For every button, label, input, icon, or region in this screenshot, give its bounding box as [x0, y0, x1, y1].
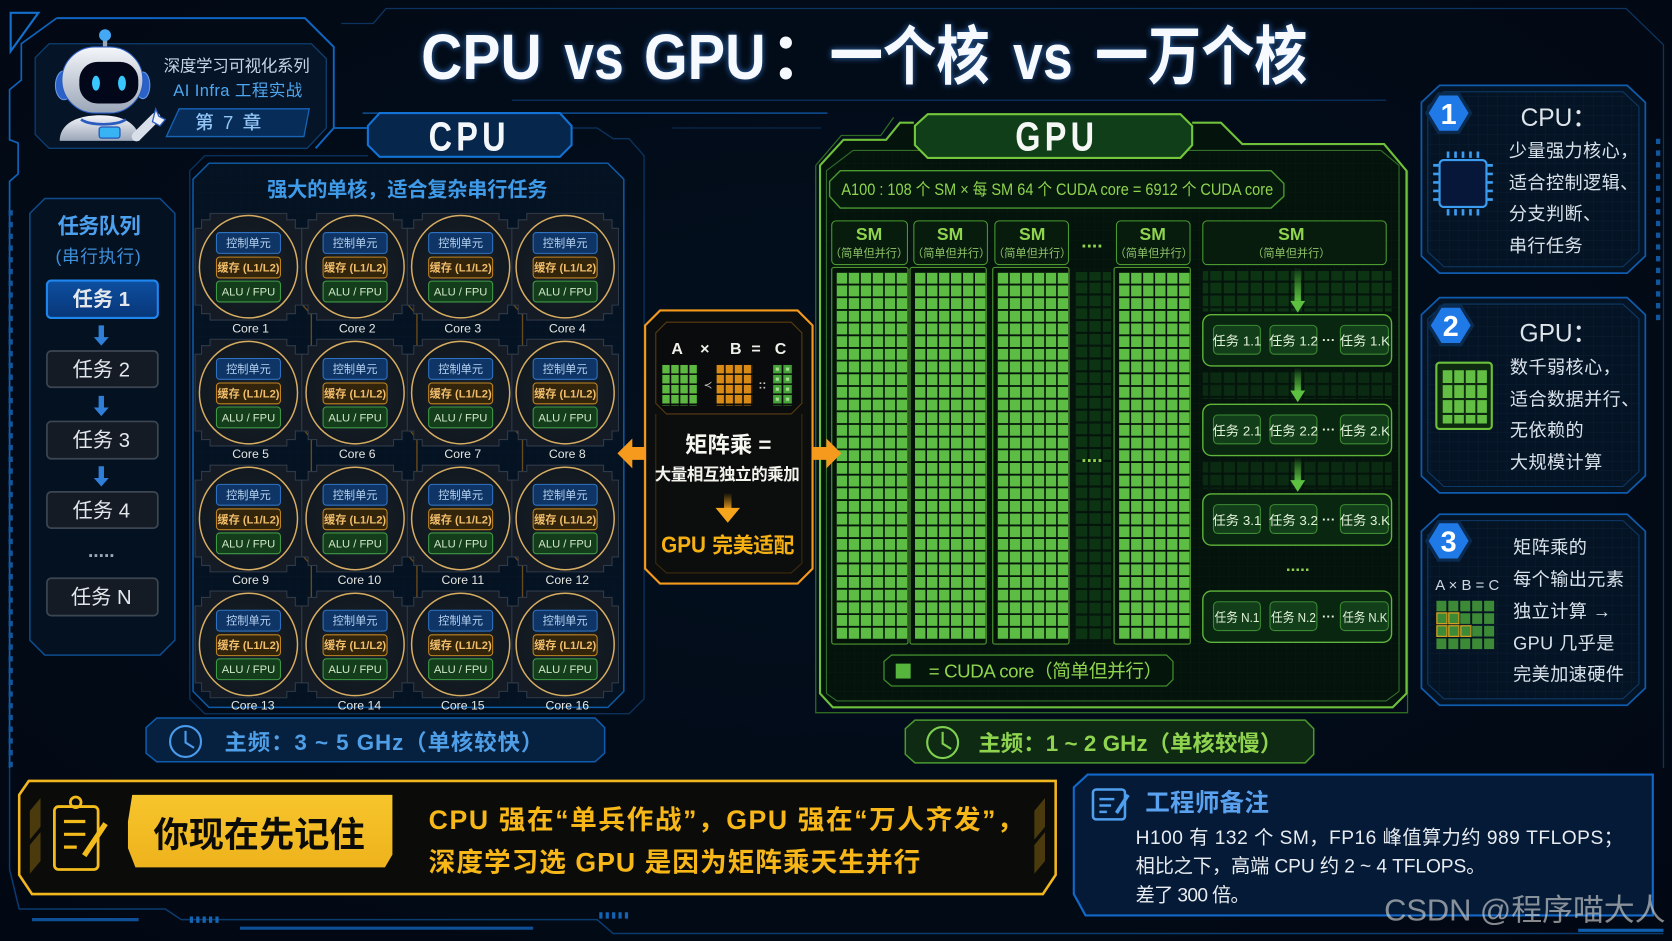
- ellipsis: .....: [1286, 556, 1310, 575]
- SM header 3: SM: [1019, 224, 1045, 244]
- core 7: ALU / FPU: [434, 412, 487, 424]
- core 3: 缓存 (L1/L2): [430, 261, 492, 275]
- core 2: 控制单元: [333, 236, 377, 250]
- formula: A × B = C: [1435, 577, 1499, 594]
- task row 2: 任务 2.2: [1269, 423, 1318, 438]
- task row 3: [1203, 494, 1392, 545]
- task row 3: 任务 3.2: [1269, 513, 1318, 528]
- task 4: [47, 492, 158, 528]
- matrix formula: C: [775, 341, 787, 358]
- title: GPU: [644, 21, 766, 93]
- core 2: Core 2: [339, 321, 376, 335]
- matrix formula: ::: [759, 378, 766, 391]
- core 1: [195, 213, 302, 335]
- title: 一万个核: [1095, 21, 1307, 93]
- SM header 1: （简单但并行）: [830, 246, 908, 260]
- core 2: ALU / FPU: [328, 287, 382, 299]
- task row N: 任务 N.K: [1343, 610, 1387, 625]
- task row 1: ···: [1322, 333, 1335, 348]
- core 4: 控制单元: [543, 236, 588, 250]
- core 10: 控制单元: [333, 488, 377, 502]
- SM core grid 1: [832, 267, 908, 644]
- GPU banner: [915, 114, 1192, 159]
- icon: clock: [170, 726, 201, 757]
- task row 1: 任务 1.K: [1340, 334, 1390, 349]
- core 11: 控制单元: [438, 488, 483, 502]
- ellipsis: ....: [1081, 446, 1103, 467]
- task 2: [47, 351, 158, 387]
- chapter tag: [166, 109, 309, 137]
- arrow: to CPU: [617, 438, 645, 468]
- note text: 差了 300 倍。: [1136, 885, 1250, 907]
- task 3: [47, 421, 158, 459]
- core 3: 控制单元: [438, 236, 483, 250]
- core 11: ALU / FPU: [434, 538, 487, 550]
- core 1: 控制单元: [226, 236, 271, 250]
- title: CPU: [421, 21, 542, 93]
- core 13: Core 13: [231, 698, 275, 712]
- takeaway line 1: CPU 强在“单兵作战”，GPU 强在“万人齐发”，: [429, 805, 1024, 835]
- core 14: 缓存 (L1/L2): [324, 638, 386, 652]
- core 16: 控制单元: [543, 614, 588, 628]
- SM core grid 4: [1114, 267, 1190, 644]
- arrow: task flow: [1290, 267, 1305, 492]
- core 10: ALU / FPU: [328, 538, 382, 550]
- panel: GPU note: [1421, 298, 1645, 493]
- series name: 深度学习可视化系列: [164, 56, 310, 75]
- task row 2: [1203, 404, 1392, 456]
- core 9: 缓存 (L1/L2): [217, 512, 280, 526]
- task 1: [47, 281, 158, 318]
- panel: matrix multiplication: [645, 310, 813, 584]
- legend: = CUDA core（简单但并行）: [929, 660, 1162, 681]
- GPU note text: 无依赖的: [1510, 420, 1584, 440]
- task N: 任务 N: [71, 586, 132, 609]
- core 4: ALU / FPU: [538, 287, 592, 299]
- panel: GPU: [816, 114, 1408, 713]
- task 3: 任务 3: [73, 429, 130, 452]
- title: vs: [564, 21, 624, 93]
- task 2: 任务 2: [73, 359, 130, 382]
- core 5: 缓存 (L1/L2): [217, 386, 280, 400]
- SM core grid 3: [993, 267, 1069, 644]
- matrix formula: [662, 341, 793, 405]
- core 3: [407, 213, 514, 335]
- SM header 3: （简单但并行）: [993, 246, 1071, 260]
- SM header detail: [1203, 221, 1386, 265]
- core 13: 缓存 (L1/L2): [217, 638, 280, 652]
- task N: [47, 578, 158, 616]
- core 1: ALU / FPU: [222, 287, 275, 299]
- core 10: [302, 465, 408, 587]
- icon: clock: [927, 727, 958, 758]
- icon: GPU grid: [1436, 363, 1492, 429]
- title: vs: [1013, 21, 1073, 93]
- ellipsis: ....: [1081, 232, 1103, 253]
- task row 1: 任务 1.2: [1269, 334, 1318, 349]
- arrow: to GPU: [813, 438, 841, 468]
- matrix conclusion: [661, 532, 795, 558]
- title: CPU: [421, 21, 542, 93]
- panel: CPU: [190, 113, 644, 714]
- title: 一个核: [830, 21, 990, 93]
- CPU note text: CPU：: [1521, 105, 1597, 132]
- panel: engineer note: [1074, 775, 1653, 915]
- panel: matrix note: [1421, 514, 1645, 705]
- task row 3: 任务 3.1: [1212, 513, 1261, 528]
- task row 2: 任务 2.K: [1340, 423, 1390, 438]
- core 12: 缓存 (L1/L2): [534, 512, 596, 526]
- arrow: down: [716, 493, 740, 523]
- core 16: ALU / FPU: [538, 664, 592, 676]
- SM header 1: [830, 221, 908, 265]
- core 13: ALU / FPU: [222, 664, 275, 676]
- core 1: 缓存 (L1/L2): [217, 261, 280, 275]
- SM header 3: [993, 221, 1071, 265]
- GPU spec: [830, 171, 1284, 208]
- core 3: ALU / FPU: [434, 287, 487, 299]
- core 11: [407, 465, 514, 587]
- title: ：: [770, 21, 834, 93]
- CPU heading: 强大的单核，适合复杂串行任务: [267, 177, 548, 201]
- GPU note text: 数千弱核心，: [1510, 357, 1621, 377]
- core 12: Core 12: [545, 573, 589, 587]
- task queue heading: 任务队列: [58, 215, 141, 239]
- remember tag: 你现在先记住: [154, 816, 365, 855]
- task row 1: 任务 1.1: [1212, 334, 1261, 349]
- core 12: 控制单元: [543, 488, 588, 502]
- matrix note text: [1513, 538, 1624, 685]
- matrix formula: ×: [700, 341, 710, 358]
- core 14: 控制单元: [333, 614, 377, 628]
- core 15: Core 15: [441, 698, 485, 712]
- matrix formula: =: [751, 341, 761, 358]
- matrix formula: A: [671, 341, 683, 358]
- core 8: ALU / FPU: [538, 412, 592, 424]
- core 9: Core 9: [232, 573, 269, 587]
- task row 2: 任务 2.1: [1212, 423, 1261, 438]
- SM header 2: SM: [937, 224, 963, 244]
- GPU note text: GPU：: [1520, 320, 1597, 347]
- takeaway line 2: 深度学习选 GPU 是因为矩阵乘天生并行: [429, 848, 920, 878]
- icon: chip: [1433, 151, 1493, 216]
- CPU banner: CPU: [429, 114, 510, 159]
- GPU note text: [1510, 320, 1640, 472]
- task row 3: 任务 3.K: [1340, 513, 1390, 528]
- core 8: 缓存 (L1/L2): [534, 386, 596, 400]
- matrix conclusion: 完美适配: [712, 534, 795, 558]
- panel: task queue: [30, 198, 175, 655]
- faint detail grid: [1203, 271, 1392, 489]
- core 16: Core 16: [545, 698, 589, 712]
- core 14: [302, 591, 408, 712]
- matrix formula: ≺: [704, 379, 713, 391]
- title: GPU: [644, 21, 766, 93]
- SM header 1: SM: [856, 224, 882, 244]
- core 16: 缓存 (L1/L2): [534, 638, 596, 652]
- core 7: [407, 339, 514, 461]
- panel: series header: [35, 18, 334, 148]
- core 15: [407, 591, 514, 712]
- core 13: [195, 591, 302, 712]
- title: vs: [564, 21, 624, 93]
- GPU spec: A100 : 108 个 SM × 每 SM 64 个 CUDA core = 6912 个 CUDA core: [841, 180, 1273, 199]
- note text: H100 有 132 个 SM，FP16 峰值算力约 989 TFLOPS；: [1136, 827, 1623, 849]
- SM core grid 2: [910, 267, 986, 644]
- task row 2: ···: [1322, 422, 1335, 437]
- note text: 相比之下，高端 CPU 约 2 ~ 4 TFLOPS。: [1136, 856, 1485, 878]
- faint middle column: [1075, 272, 1111, 640]
- SM header detail: SM: [1278, 224, 1305, 244]
- chapter tag: 第 7 章: [195, 112, 261, 133]
- core 15: 缓存 (L1/L2): [430, 638, 492, 652]
- matrix note text: 独立计算 →: [1513, 602, 1611, 622]
- GPU note text: 大规模计算: [1510, 452, 1603, 472]
- GPU note text: 适合数据并行、: [1510, 389, 1640, 409]
- core 5: ALU / FPU: [222, 412, 275, 424]
- task row N: ···: [1322, 609, 1335, 624]
- icon: result grid: [1436, 601, 1496, 651]
- badge 3: [1427, 522, 1470, 560]
- core 12: [512, 465, 618, 587]
- badge 2: [1429, 306, 1473, 345]
- GPU banner: GPU: [1015, 114, 1098, 159]
- task row N: [1203, 591, 1392, 642]
- matrix description: 大量相互独立的乘加: [655, 464, 800, 484]
- GPU frequency bar: 主频：1 ~ 2 GHz（单核较慢）: [978, 731, 1282, 756]
- title: 一万个核: [1095, 21, 1307, 93]
- GPU frequency bar: [905, 720, 1314, 763]
- icon: note edit: [1093, 790, 1128, 819]
- badge 2: 2: [1443, 311, 1459, 343]
- SM header 4: [1115, 221, 1193, 265]
- matrix conclusion: GPU: [661, 532, 706, 558]
- core 6: 缓存 (L1/L2): [324, 386, 386, 400]
- CPU note text: 分支判断、: [1509, 204, 1602, 224]
- matrix heading: 矩阵乘 =: [685, 432, 771, 457]
- task 4: 任务 4: [73, 499, 130, 522]
- core 15: 控制单元: [438, 614, 483, 628]
- matrix note text: 矩阵乘的: [1513, 538, 1587, 558]
- core 7: 缓存 (L1/L2): [430, 386, 492, 400]
- task row N: 任务 N.1: [1215, 610, 1259, 625]
- core 16: [512, 591, 618, 712]
- legend: [884, 655, 1173, 686]
- core 5: Core 5: [232, 447, 269, 461]
- ellipsis: .....: [88, 541, 115, 562]
- note heading: 工程师备注: [1145, 789, 1269, 817]
- core 11: Core 11: [441, 573, 484, 587]
- task 1: 任务 1: [73, 288, 130, 311]
- core 10: Core 10: [338, 573, 381, 587]
- task queue subheading: (串行执行): [55, 246, 141, 266]
- core 13: 控制单元: [226, 614, 271, 628]
- SM header 2: （简单但并行）: [912, 246, 990, 260]
- CPU note text: 串行任务: [1509, 236, 1583, 256]
- badge 3: 3: [1441, 527, 1457, 559]
- core 15: ALU / FPU: [434, 664, 487, 676]
- badge 1: [1427, 94, 1470, 132]
- note text: [1136, 827, 1623, 907]
- SM header 4: SM: [1140, 224, 1166, 244]
- core 3: Core 3: [444, 321, 481, 335]
- task row 3: ···: [1322, 512, 1335, 527]
- core 9: 控制单元: [226, 488, 271, 502]
- core 12: ALU / FPU: [538, 538, 592, 550]
- core 9: ALU / FPU: [222, 538, 275, 550]
- core 4: Core 4: [549, 321, 586, 335]
- title: 一个核: [830, 21, 990, 93]
- panel: remember callout: [19, 781, 1056, 894]
- CPU banner: [368, 113, 572, 159]
- title: [421, 21, 1307, 93]
- SM header 2: [912, 221, 990, 265]
- icon: robot mascot: [55, 29, 165, 141]
- core 5: 控制单元: [226, 362, 271, 376]
- task row N: 任务 N.2: [1271, 610, 1316, 625]
- core 1: Core 1: [232, 321, 269, 335]
- core 5: [195, 339, 302, 461]
- CPU frequency bar: 主频：3 ~ 5 GHz（单核较快）: [224, 730, 543, 755]
- panel: CPU note: [1421, 85, 1645, 273]
- SM header detail: （简单但并行）: [1252, 246, 1330, 260]
- matrix formula: B: [730, 341, 742, 358]
- core 8: [512, 339, 618, 461]
- core 8: Core 8: [549, 447, 586, 461]
- core 9: [195, 465, 302, 587]
- core 7: 控制单元: [438, 362, 483, 376]
- remember tag: [128, 795, 392, 867]
- matrix note text: 每个输出元素: [1513, 570, 1624, 590]
- core 6: ALU / FPU: [328, 412, 382, 424]
- core 4: [512, 213, 618, 335]
- watermark: CSDN @程序喵大人: [1384, 893, 1666, 928]
- core 14: ALU / FPU: [328, 664, 382, 676]
- core 14: Core 14: [338, 698, 381, 712]
- CPU frequency bar: [146, 718, 605, 762]
- matrix note text: GPU 几乎是: [1513, 634, 1615, 654]
- SM header 4: （简单但并行）: [1115, 246, 1193, 260]
- CPU note text: 适合控制逻辑、: [1509, 173, 1639, 193]
- core 11: 缓存 (L1/L2): [430, 512, 492, 526]
- badge 1: 1: [1441, 99, 1457, 131]
- core 2: [302, 213, 408, 335]
- core 10: 缓存 (L1/L2): [324, 512, 386, 526]
- CPU note text: 少量强力核心，: [1509, 141, 1639, 161]
- core 2: 缓存 (L1/L2): [324, 261, 386, 275]
- CPU note text: [1509, 105, 1639, 256]
- core 6: 控制单元: [333, 362, 377, 376]
- circuit traces: [296, 240, 522, 625]
- title: vs: [1013, 21, 1073, 93]
- core 6: [302, 339, 408, 461]
- series subtitle: AI Infra 工程实战: [173, 81, 303, 100]
- icon: clipboard: [54, 797, 106, 870]
- matrix note text: 完美加速硬件: [1513, 665, 1624, 685]
- core 4: 缓存 (L1/L2): [534, 261, 596, 275]
- core 6: Core 6: [339, 447, 376, 461]
- core 7: Core 7: [444, 447, 481, 461]
- core 8: 控制单元: [543, 362, 588, 376]
- task row 1: [1203, 315, 1392, 366]
